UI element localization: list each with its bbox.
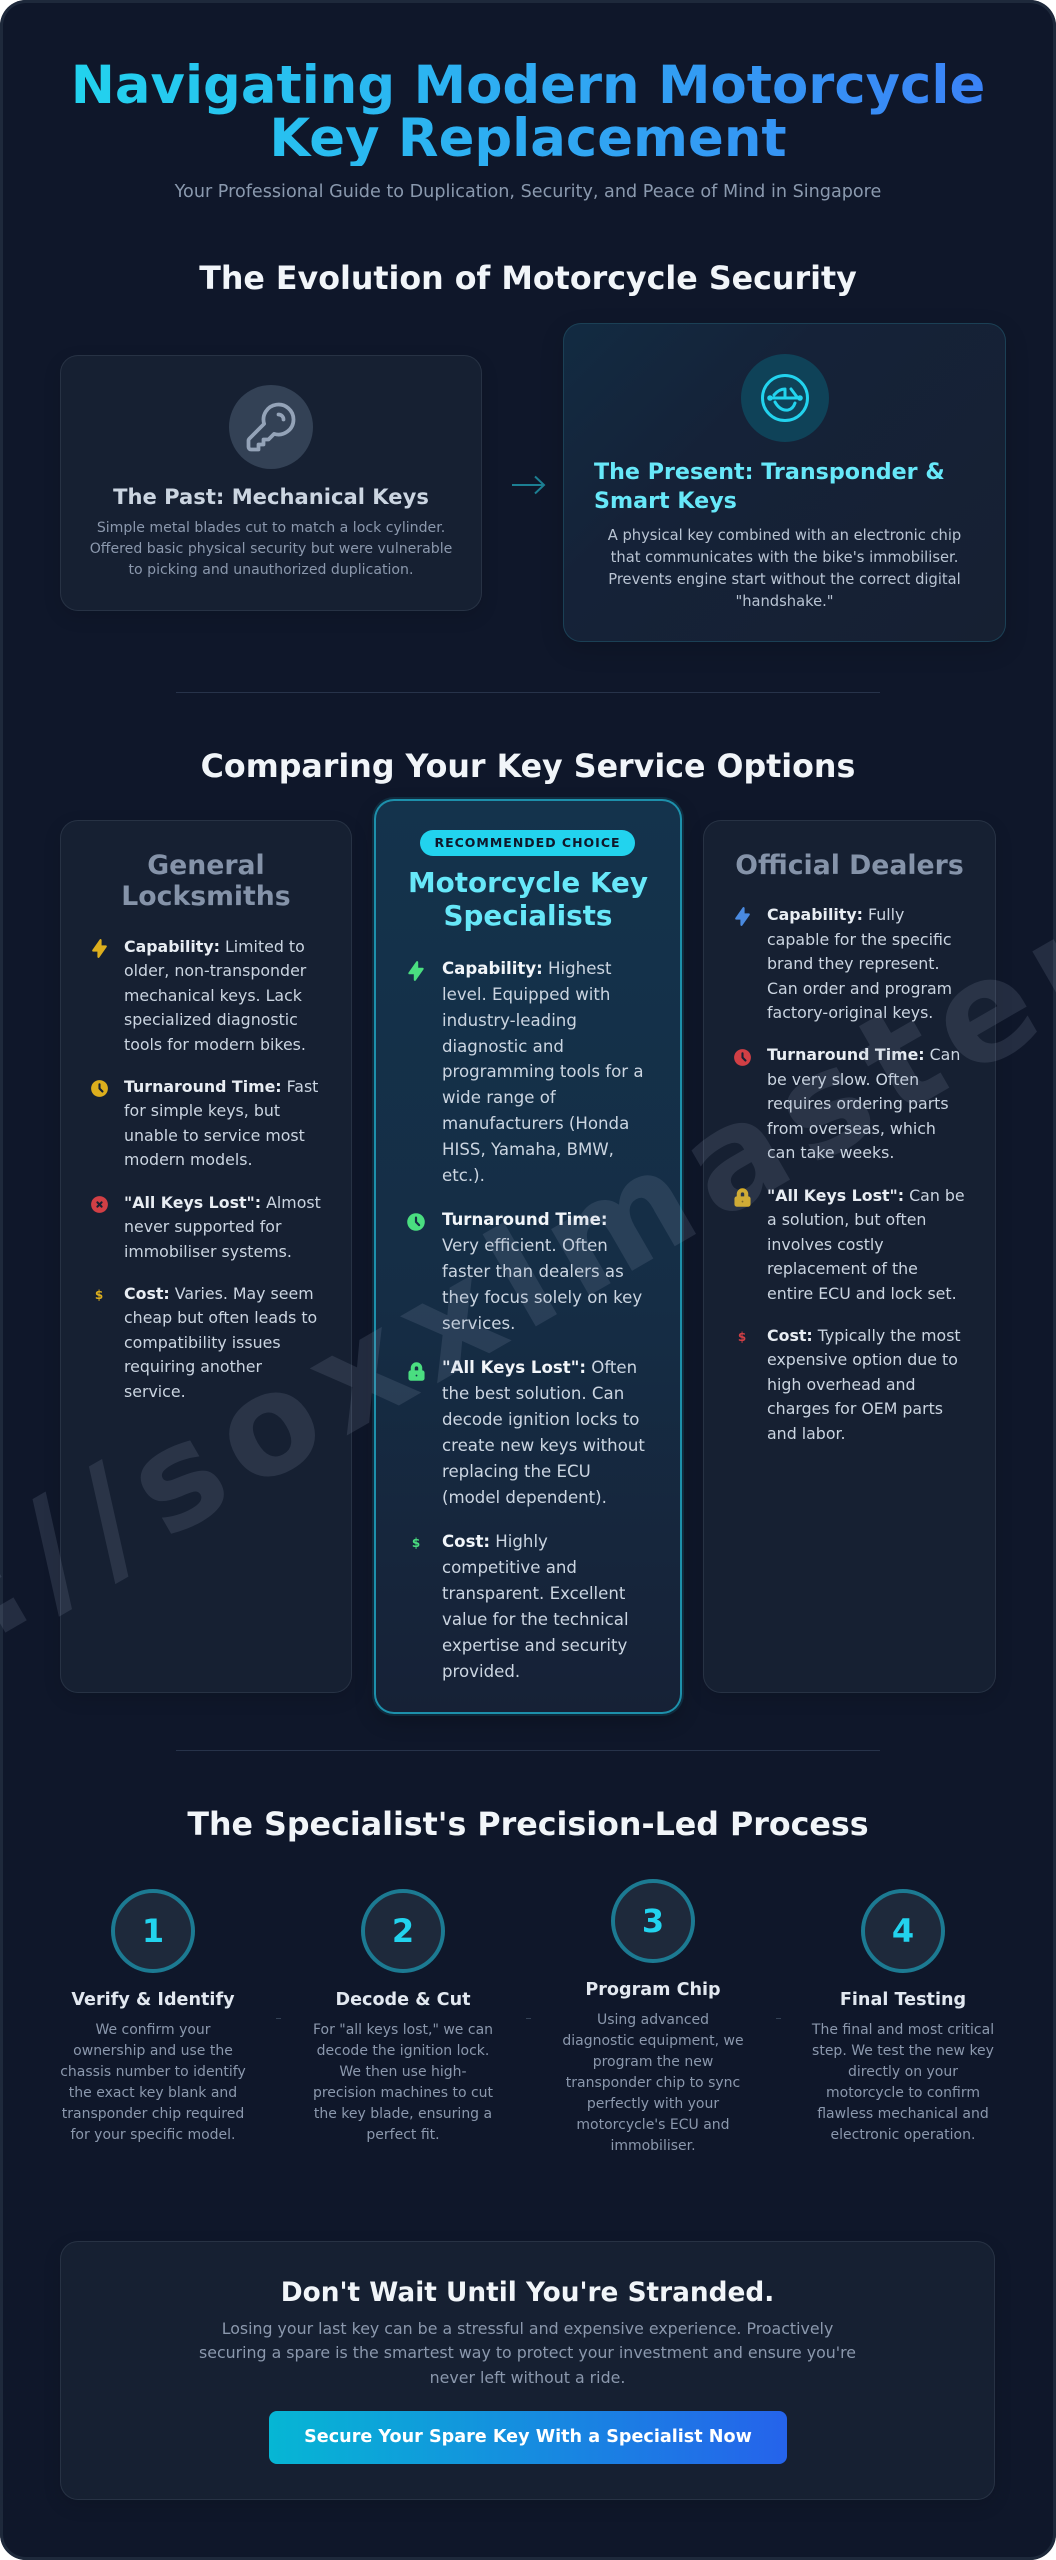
title: Key Replacement [269, 108, 787, 169]
step 3 text: diagnostic equipment, we [562, 2033, 744, 2049]
title [68, 60, 988, 166]
all keys lost row: (model dependent). [442, 1488, 607, 1507]
panel: general locksmiths [60, 820, 352, 1693]
past description: Offered basic physical security but were vulnerable [90, 541, 452, 557]
cost row: expensive option due to [767, 1350, 958, 1369]
turnaround row: Turnaround Time: Can [767, 1045, 960, 1064]
cta text: never left without a ride. [430, 2368, 625, 2387]
capability row: manufacturers (Honda [442, 1114, 629, 1133]
panel: the present transponder and smart keys [563, 323, 1006, 642]
step 3 text: motorcycle's ECU and [576, 2117, 730, 2133]
step 2 text: perfect fit. [366, 2127, 440, 2143]
step 4 [812, 1889, 994, 2143]
step 1 text [60, 2022, 246, 2143]
turnaround row: services. [442, 1314, 515, 1333]
panel: call to action [60, 2241, 995, 2500]
panel: official dealers [703, 820, 996, 1693]
locksmiths heading [121, 850, 291, 912]
cost row: Cost: Varies. May seem [124, 1284, 314, 1303]
step 1 text: We confirm your [95, 2022, 211, 2038]
step 4 text [812, 2022, 994, 2143]
turnaround row: modern models. [124, 1150, 252, 1169]
present description: "handshake." [735, 593, 834, 610]
capability row: capable for the specific [767, 930, 952, 949]
step 3 text: program the new [593, 2054, 713, 2070]
capability row: Capability: Limited to [124, 937, 305, 956]
present description: Prevents engine start without the correct digital [608, 571, 961, 588]
cta text: securing a spare is the smartest way to protect your investment and ensure you're [199, 2343, 856, 2362]
past description [90, 520, 452, 578]
step 3 text [562, 2012, 744, 2154]
panel: motorcycle key specialists: $ [412, 1536, 420, 1550]
turnaround row: be very slow. Often [767, 1070, 919, 1089]
step 3 [562, 1879, 744, 2154]
heading: evolution of security: The Evolution of Motorcycle Security [199, 260, 857, 296]
capability row: brand they represent. [767, 954, 940, 973]
turnaround row: requires ordering parts [767, 1094, 949, 1113]
dealers heading: Official Dealers [735, 850, 964, 881]
all keys lost row: "All Keys Lost": Can be [767, 1186, 965, 1205]
step number 3: 3 [642, 1902, 664, 1940]
step 4 text: directly on your [848, 2064, 958, 2080]
turnaround row: Turnaround Time: [442, 1210, 608, 1229]
step number 1 [111, 1889, 195, 1973]
locksmiths heading: General [147, 850, 265, 881]
cta button [269, 2411, 787, 2464]
cost row [412, 1532, 629, 1681]
icon: transponder chip [740, 354, 828, 442]
step 1 text: for your specific model. [70, 2127, 236, 2143]
cost row: Cost: Typically the most [767, 1326, 961, 1345]
all keys lost row: "All Keys Lost": Often [442, 1358, 637, 1377]
step 2 text: precision machines to cut [313, 2085, 493, 2101]
capability row [735, 905, 952, 1022]
step 1 [60, 1889, 246, 2143]
cost row: value for the technical [442, 1610, 629, 1629]
capability row: mechanical keys. Lack [124, 986, 302, 1005]
turnaround row: unable to service most [124, 1126, 305, 1145]
all keys lost row: replacement of the [767, 1259, 918, 1278]
step 2 text: the key blade, ensuring a [314, 2106, 492, 2122]
heading: process: The Specialist's Precision-Led Process [187, 1807, 869, 1843]
locksmiths list [91, 937, 321, 1401]
turnaround row: for simple keys, but [124, 1101, 280, 1120]
step 4 text: electronic operation. [831, 2127, 975, 2143]
present heading: The Present: Transponder & [594, 459, 945, 485]
step 3 text: Using advanced [597, 2012, 709, 2028]
cost row: expertise and security [442, 1636, 627, 1655]
step 1 text: ownership and use the [73, 2043, 233, 2059]
step 1 heading: Verify & Identify [71, 1990, 235, 2010]
cost row: charges for OEM parts [767, 1399, 943, 1418]
cost row: provided. [442, 1662, 520, 1681]
step 2 heading: Decode & Cut [335, 1990, 471, 2010]
cost row: compatibility issues [124, 1333, 281, 1352]
step 2 [313, 1889, 493, 2143]
cost row [738, 1326, 961, 1443]
step 3 heading: Program Chip [585, 1980, 721, 2000]
cost row [95, 1284, 317, 1401]
all keys lost row [734, 1186, 965, 1303]
turnaround row [91, 1077, 318, 1169]
step 2 text: For "all keys lost," we can [313, 2022, 493, 2038]
cost row: requiring another [124, 1357, 262, 1376]
panel: the past mechanical keys [60, 355, 482, 611]
cost row: service. [124, 1382, 186, 1401]
step 1 text: chassis number to identify [60, 2064, 246, 2080]
all keys lost row [91, 1193, 321, 1261]
specialists list [407, 959, 645, 1681]
turnaround row: can take weeks. [767, 1143, 894, 1162]
all keys lost row [408, 1358, 645, 1507]
capability row [408, 959, 644, 1185]
recommended badge: RECOMMENDED CHOICE [434, 835, 621, 850]
arrow: past to present [512, 476, 546, 494]
dealers list [734, 905, 965, 1443]
panel: general locksmiths: $ [95, 1288, 103, 1302]
cta button: Secure Your Spare Key With a Specialist Now [304, 2427, 752, 2447]
all keys lost row: replacing the ECU [442, 1462, 591, 1481]
step number 1: 1 [142, 1912, 164, 1950]
panel: motorcycle key specialists [374, 799, 682, 1714]
cost row: transparent. Excellent [442, 1584, 625, 1603]
step number 2: 2 [392, 1912, 414, 1950]
step 2 text: decode the ignition lock. [317, 2043, 489, 2059]
turnaround row: Turnaround Time: Fast [124, 1077, 318, 1096]
capability row: Can order and program [767, 979, 952, 998]
step number 2 [361, 1889, 445, 1973]
step 4 text: The final and most critical [812, 2022, 994, 2038]
step 1 text: the exact key blank and [69, 2085, 237, 2101]
all keys lost row: entire ECU and lock set. [767, 1284, 957, 1303]
specialists heading: Motorcycle Key [408, 866, 648, 899]
step 4 text: motorcycle to confirm [826, 2085, 980, 2101]
step 3 text: immobiliser. [610, 2138, 696, 2154]
recommended badge [420, 830, 635, 856]
past description: to picking and unauthorized duplication. [129, 562, 413, 578]
heading: comparing options: Comparing Your Key Service Options [201, 749, 855, 785]
present description [608, 527, 961, 610]
subtitle: Your Professional Guide to Duplication, Security, and Peace of Mind in Singapore [175, 182, 881, 202]
specialists heading: Specialists [444, 899, 612, 932]
step number 4: 4 [892, 1912, 914, 1950]
turnaround row: Very efficient. Often [442, 1236, 608, 1255]
step 3 text: transponder chip to sync [566, 2075, 740, 2091]
turnaround row: from overseas, which [767, 1119, 936, 1138]
step 1 text: transponder chip required [62, 2106, 244, 2122]
capability row: Capability: Highest [442, 959, 612, 978]
turnaround row [734, 1045, 960, 1162]
turnaround row: they focus solely on key [442, 1288, 642, 1307]
icon: key [229, 385, 313, 469]
all keys lost row: a solution, but often [767, 1210, 926, 1229]
present heading [594, 459, 945, 514]
step number 3 [611, 1879, 695, 1963]
all keys lost row: "All Keys Lost": Almost [124, 1193, 321, 1212]
capability row: diagnostic and [442, 1037, 564, 1056]
capability row: factory-original keys. [767, 1003, 933, 1022]
step 4 heading: Final Testing [840, 1990, 966, 2010]
step 4 text: flawless mechanical and [817, 2106, 989, 2122]
locksmiths heading: Locksmiths [121, 881, 291, 912]
present heading: Smart Keys [594, 488, 737, 514]
past description: Simple metal blades cut to match a lock cylinder. [97, 520, 445, 536]
capability row: specialized diagnostic [124, 1010, 298, 1029]
present description: A physical key combined with an electronic chip [608, 527, 961, 544]
all keys lost row: decode ignition locks to [442, 1410, 639, 1429]
cost row: high overhead and [767, 1375, 916, 1394]
all keys lost row: the best solution. Can [442, 1384, 624, 1403]
title: Navigating Modern Motorcycle [71, 55, 985, 116]
present description: that communicates with the bike's immobiliser. [611, 549, 958, 566]
step 4 text: step. We test the new key [812, 2043, 994, 2059]
panel: official dealers: $ [738, 1330, 746, 1344]
step 3 text: perfectly with your [587, 2096, 719, 2112]
capability row: etc.). [442, 1166, 485, 1185]
cost row: Cost: Highly [442, 1532, 548, 1551]
capability row: tools for modern bikes. [124, 1035, 306, 1054]
capability row [92, 937, 306, 1054]
specialists heading [408, 866, 648, 932]
all keys lost row: never supported for [124, 1217, 281, 1236]
capability row: programming tools for a [442, 1062, 644, 1081]
all keys lost row: create new keys without [442, 1436, 645, 1455]
cta text [199, 2319, 856, 2387]
past heading: The Past: Mechanical Keys [113, 484, 429, 509]
turnaround row: faster than dealers as [442, 1262, 624, 1281]
capability row: Capability: Fully [767, 905, 904, 924]
cost row: cheap but often leads to [124, 1308, 317, 1327]
step number 4 [861, 1889, 945, 1973]
step 2 text [313, 2022, 493, 2143]
capability row: older, non-transponder [124, 961, 306, 980]
cost row: and labor. [767, 1424, 846, 1443]
step 2 text: We then use high- [339, 2064, 467, 2080]
capability row: wide range of [442, 1088, 556, 1107]
turnaround row [407, 1210, 642, 1333]
cta text: Losing your last key can be a stressful and expensive experience. Proactively [222, 2319, 833, 2338]
capability row: HISS, Yamaha, BMW, [442, 1140, 614, 1159]
capability row: level. Equipped with [442, 985, 610, 1004]
all keys lost row: involves costly [767, 1235, 884, 1254]
cta heading: Don't Wait Until You're Stranded. [281, 2278, 774, 2308]
cost row: competitive and [442, 1558, 577, 1577]
capability row: industry-leading [442, 1011, 577, 1030]
all keys lost row: immobiliser systems. [124, 1242, 292, 1261]
